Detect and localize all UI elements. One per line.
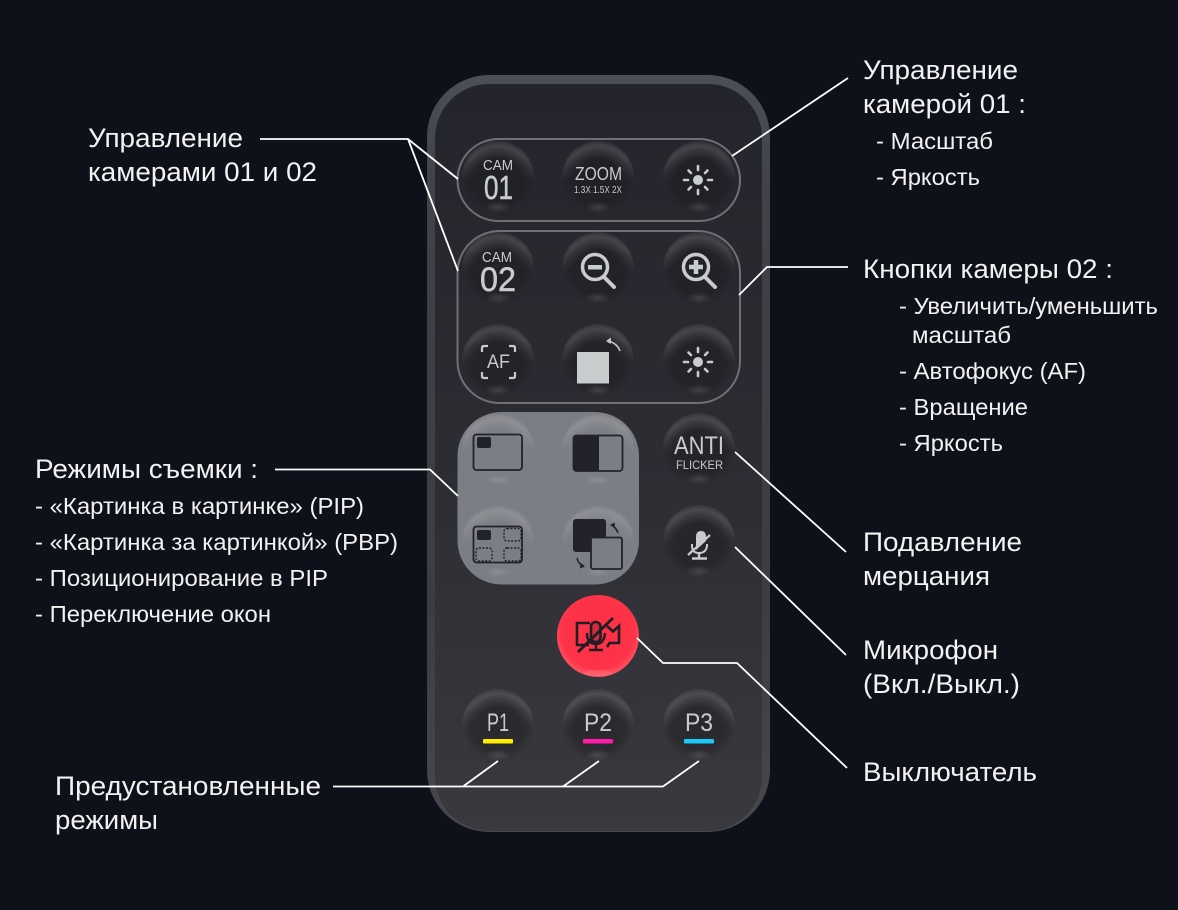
callout: cameras 01 and 02 <box>88 123 458 271</box>
button: zoom <box>561 140 635 214</box>
callout: camera 01 control: - Яркость <box>876 164 980 190</box>
callout: cameras 01 and 02: камерами 01 и 02 <box>88 157 317 187</box>
panel: camera 02 group <box>458 231 740 403</box>
button: CAM 02 <box>461 231 535 305</box>
callout: power switch <box>637 638 1037 787</box>
button: rotate <box>561 323 635 397</box>
button: window swap <box>562 505 634 577</box>
callout: camera 02 buttons: Кнопки камеры 02 : <box>863 254 1113 284</box>
button: CAM 01: CAM <box>483 158 513 174</box>
callout: power switch: Выключатель <box>863 757 1037 787</box>
button: brightness camera 02 <box>662 323 736 397</box>
button: anti flicker: ANTI <box>674 432 724 460</box>
callout: flicker suppression: Подавление <box>863 527 1022 557</box>
callout: microphone: Микрофон <box>863 635 998 665</box>
callout: flicker suppression <box>735 452 1022 591</box>
button: preset P3 <box>662 688 736 762</box>
panel: shooting modes <box>458 412 639 584</box>
button: autofocus <box>461 323 535 397</box>
button: preset P2: P2 <box>584 709 612 737</box>
button: PIP position <box>462 505 534 577</box>
panel: camera 01 group <box>458 139 740 221</box>
callout: shooting modes: - «Картинка в картинке» (PIP) <box>35 493 364 519</box>
callout: camera 02 buttons: - Вращение <box>899 394 1028 420</box>
button: microphone <box>662 504 736 578</box>
callout: camera 01 control: камерой 01 : <box>863 89 1026 119</box>
button: CAM 01 <box>461 140 535 214</box>
button: anti flicker: FLICKER <box>676 460 723 472</box>
button: zoom in <box>662 231 736 305</box>
callout: microphone <box>735 547 1020 699</box>
callout: shooting modes <box>35 454 458 627</box>
callout: camera 01 control: Управление <box>863 55 1018 85</box>
remote control <box>427 75 770 832</box>
button: preset P1 <box>461 688 535 762</box>
callout: camera 02 buttons <box>739 254 1158 456</box>
button: power red <box>557 595 639 677</box>
callout: microphone: (Вкл./Выкл.) <box>863 669 1020 699</box>
callout: camera 01 control <box>732 55 1026 190</box>
callout: shooting modes: - Переключение окон <box>35 601 271 627</box>
button: preset P1: P1 <box>487 709 509 737</box>
button: zoom: ZOOM <box>575 164 622 184</box>
button: autofocus: AF <box>487 352 510 373</box>
button: CAM 02: CAM <box>482 250 512 266</box>
callout: camera 01 control: - Масштаб <box>876 128 993 154</box>
button: preset P3: P3 <box>685 709 713 737</box>
remote body <box>427 75 770 832</box>
button: PIP <box>462 413 534 485</box>
button: zoom out <box>561 231 635 305</box>
callout: shooting modes: Режимы съемки : <box>35 454 258 484</box>
callout: preset modes: Предустановленные <box>55 771 321 801</box>
callout: camera 02 buttons: масштаб <box>912 322 1011 348</box>
callout: cameras 01 and 02: Управление <box>88 123 243 153</box>
callout: shooting modes: - Позиционирование в PIP <box>35 565 328 591</box>
button: preset P2 <box>561 688 635 762</box>
button: PBP <box>562 413 634 485</box>
callout: camera 02 buttons: - Автофокус (AF) <box>899 358 1086 384</box>
button: zoom: 1.3X 1.5X 2X <box>574 185 622 196</box>
button: brightness camera 01 <box>662 140 736 214</box>
button: anti flicker <box>662 412 736 486</box>
callout: flicker suppression: мерцания <box>863 561 990 591</box>
button: CAM 01: 01 <box>484 169 513 206</box>
callout: preset modes: режимы <box>55 805 158 835</box>
button: CAM 02: 02 <box>480 261 516 299</box>
callout: shooting modes: - «Картинка за картинкой» (PBP) <box>35 529 398 555</box>
callout: camera 02 buttons: - Увеличить/уменьшить <box>899 293 1158 319</box>
callout: preset modes <box>55 761 699 835</box>
callout: camera 02 buttons: - Яркость <box>899 430 1003 456</box>
